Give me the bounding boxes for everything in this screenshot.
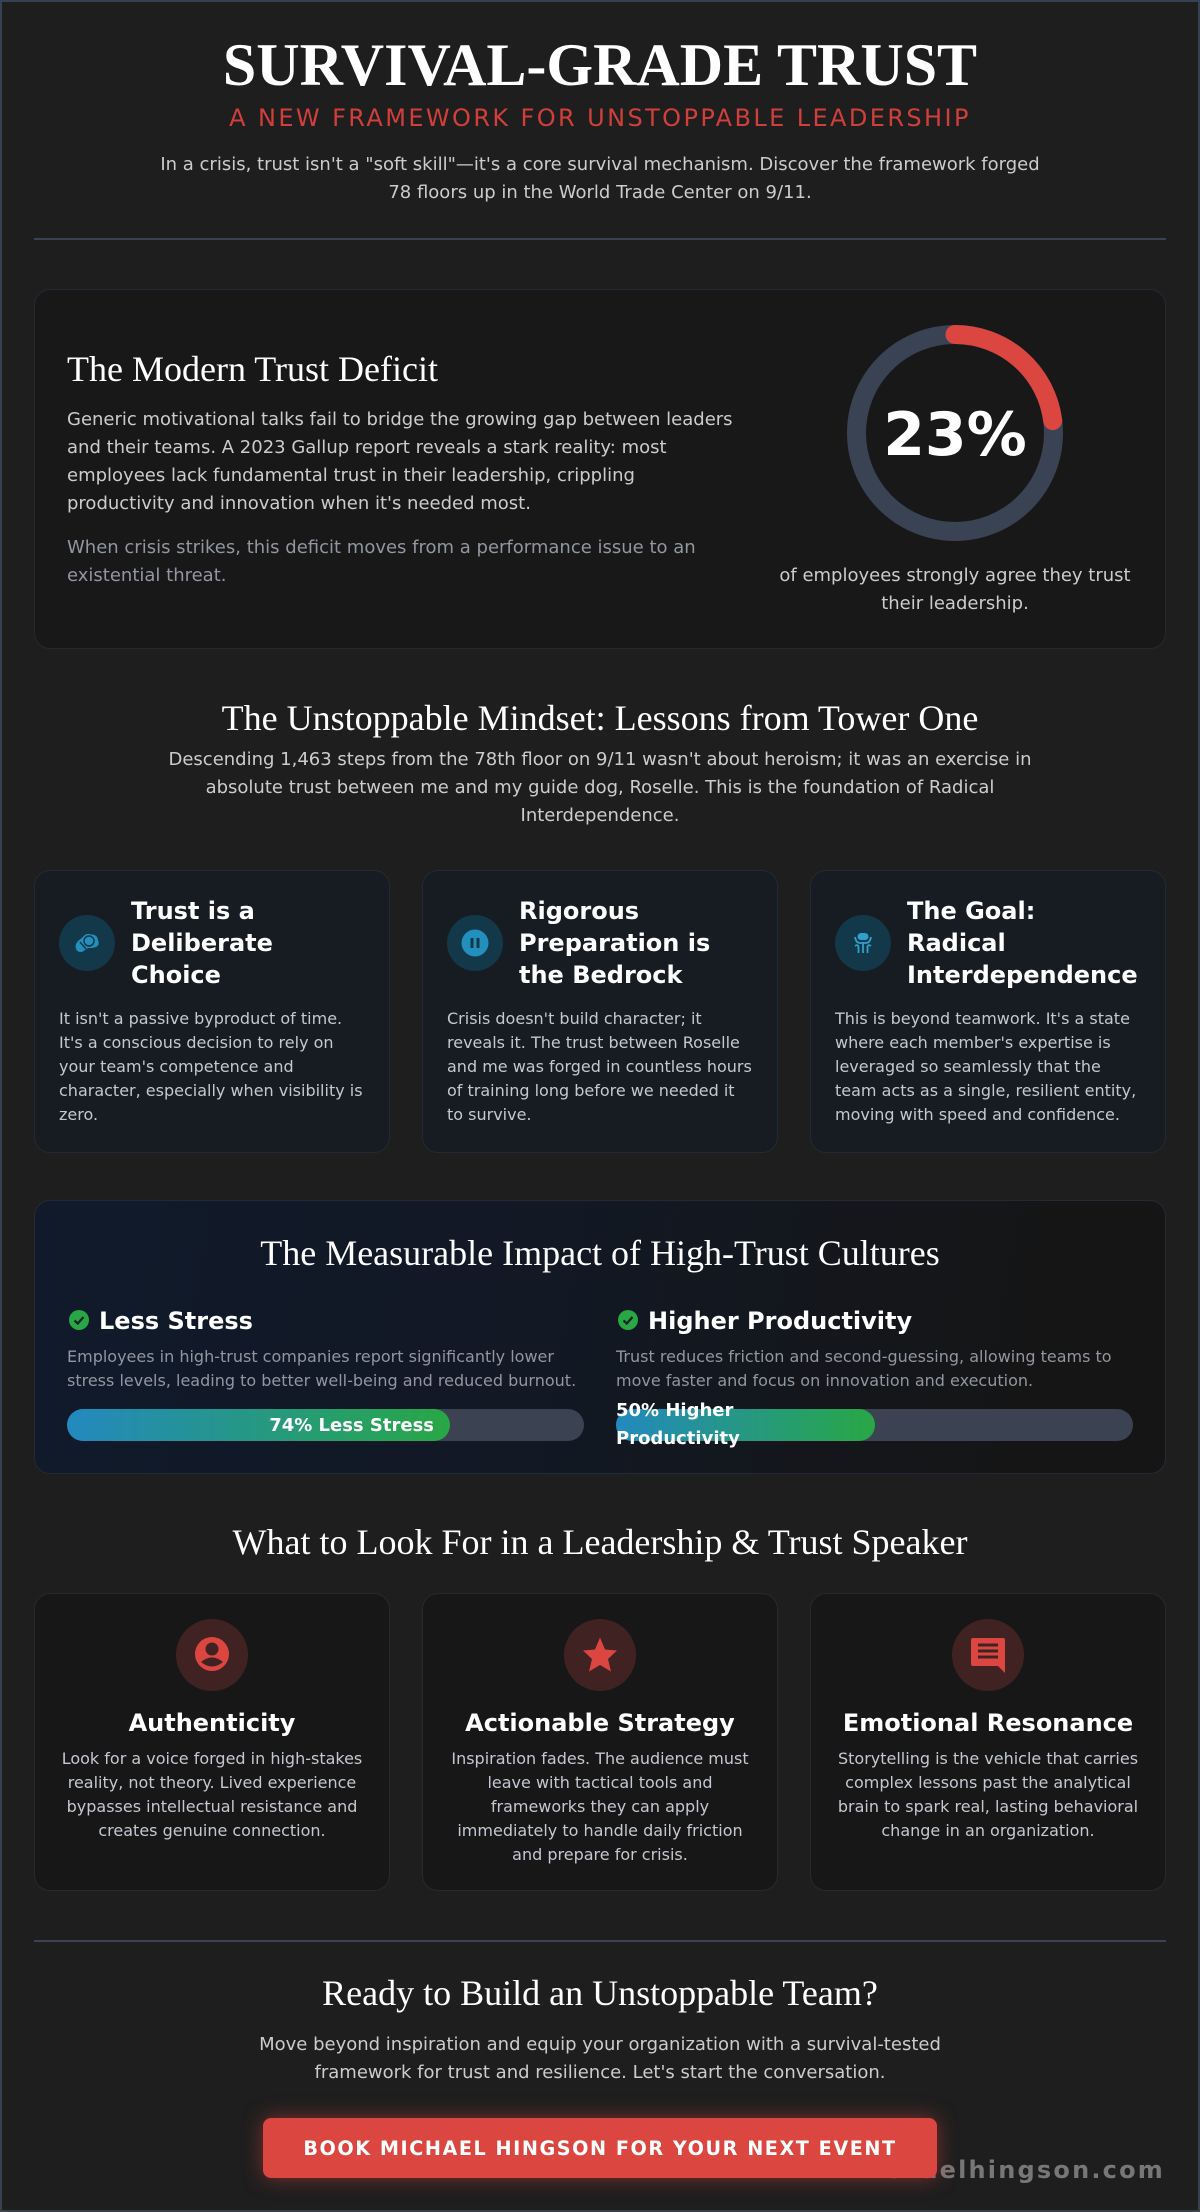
icon: handshake — [59, 915, 115, 971]
card text: complex lessons past the analytical — [845, 1773, 1131, 1792]
section heading: what to look for: What to Look For in a Leadership & Trust Speaker — [233, 1522, 967, 1562]
metric text — [67, 1347, 576, 1390]
card title: Choice — [131, 961, 221, 989]
call to action text — [259, 2034, 941, 2083]
card text: moving with speed and confidence. — [835, 1105, 1120, 1124]
section heading: mindset — [168, 698, 1032, 826]
card text: This is beyond teamwork. It's a state — [835, 1009, 1130, 1028]
card text — [834, 1009, 1136, 1124]
card text: immediately to handle daily friction — [457, 1821, 743, 1840]
metric text: stress levels, leading to better well-being and reduced burnout. — [67, 1371, 576, 1390]
card text: and prepare for crisis. — [512, 1845, 688, 1864]
icon: pause circle — [447, 915, 503, 971]
card title — [131, 897, 273, 989]
card text: Look for a voice forged in high-stakes — [62, 1749, 362, 1768]
card text: Storytelling is the vehicle that carries — [838, 1749, 1138, 1768]
card title: Preparation is — [519, 929, 710, 957]
card title: Actionable Strategy — [465, 1709, 735, 1737]
card text: creates genuine connection. — [98, 1821, 326, 1840]
card text: bypasses intellectual resistance and — [67, 1797, 357, 1816]
metric text — [616, 1347, 1112, 1390]
panel: measurable impact — [34, 1200, 1166, 1474]
card text — [838, 1749, 1138, 1840]
intro: absolute trust between me and my guide dog, Roselle. This is the foundation of Radical — [206, 777, 994, 798]
title: SURVIVAL-GRADE TRUST — [223, 32, 977, 98]
metric: higher productivity — [616, 1307, 1112, 1390]
button: BOOK MICHAEL HINGSON FOR YOUR NEXT EVENT — [303, 2137, 897, 2160]
card text: team acts as a single, resilient entity, — [835, 1081, 1136, 1100]
bar fill — [67, 1409, 450, 1441]
intro text: 78 floors up in the World Trade Center on 9/11. — [388, 182, 812, 203]
body text — [67, 409, 733, 514]
intro — [168, 749, 1032, 826]
panel: modern trust deficit — [34, 289, 1166, 649]
card title: Radical — [907, 929, 1006, 957]
card text: reality, not theory. Lived experience — [68, 1773, 356, 1792]
donut chart: 23% — [847, 325, 1063, 541]
card: rigorous preparation — [422, 870, 778, 1153]
card title — [519, 897, 710, 989]
card title: Emotional Resonance — [843, 1709, 1133, 1737]
donut caption: of employees strongly agree they trust — [779, 565, 1131, 586]
card title — [907, 897, 1138, 989]
card text: and me was forged in countless hours — [447, 1057, 752, 1076]
card text — [59, 1009, 363, 1124]
header — [160, 32, 1040, 203]
metric title: Higher Productivity — [648, 1307, 912, 1335]
body text: employees lack fundamental trust in their leadership, crippling — [67, 465, 635, 486]
button — [263, 2118, 937, 2178]
heading: The Unstoppable Mindset: Lessons from Tower One — [222, 698, 978, 738]
card title: the Bedrock — [519, 961, 682, 989]
call to action text: framework for trust and resilience. Let's start the conversation. — [315, 2062, 885, 2083]
impact heading: The Measurable Impact of High-Trust Cultures — [260, 1233, 940, 1273]
heading: The Modern Trust Deficit — [67, 349, 438, 389]
card text: It isn't a passive byproduct of time. — [59, 1009, 342, 1028]
card text: Crisis doesn't build character; it — [447, 1009, 702, 1028]
card title: Rigorous — [519, 897, 639, 925]
card text: change in an organization. — [881, 1821, 1095, 1840]
card text: character, especially when visibility is — [59, 1081, 363, 1100]
intro text — [160, 154, 1040, 203]
body text: productivity and innovation when it's needed most. — [67, 493, 531, 514]
metric title: Less Stress — [99, 1307, 253, 1335]
bar label: 74% Less Stress — [269, 1415, 434, 1436]
card: actionable strategy — [422, 1593, 778, 1891]
card: radical interdependence — [810, 870, 1166, 1153]
card title: Interdependence — [907, 961, 1138, 989]
icon: people — [835, 915, 891, 971]
icon: check — [618, 1310, 638, 1330]
card text: your team's competence and — [59, 1057, 294, 1076]
bar: 74% less stress — [67, 1409, 584, 1441]
card text: frameworks they can apply — [491, 1797, 709, 1816]
card: emotional resonance — [810, 1593, 1166, 1891]
watermark: michaelhingson.com — [848, 2156, 1165, 2184]
card text: of training long before we needed it — [447, 1081, 735, 1100]
icon: speech bubble — [952, 1619, 1024, 1691]
card text: brain to spark real, lasting behavioral — [838, 1797, 1138, 1816]
metric text: Trust reduces friction and second-guessing, allowing teams to — [616, 1347, 1112, 1366]
intro: Descending 1,463 steps from the 78th floor on 9/11 wasn't about heroism; it was an exercise in — [168, 749, 1032, 770]
bar fill — [616, 1409, 875, 1441]
muted text — [67, 537, 696, 586]
icon: star — [564, 1619, 636, 1691]
card text: zero. — [59, 1105, 98, 1124]
call to action heading: Ready to Build an Unstoppable Team? — [322, 1973, 878, 2013]
card text: reveals it. The trust between Roselle — [447, 1033, 740, 1052]
card text: Inspiration fades. The audience must — [451, 1749, 749, 1768]
card title: Trust is a — [131, 897, 255, 925]
card title: The Goal: — [907, 897, 1035, 925]
icon: user — [176, 1619, 248, 1691]
icon: check — [69, 1310, 89, 1330]
card: trust is a deliberate choice — [34, 870, 390, 1153]
metric: less stress — [67, 1307, 576, 1390]
metric text: Employees in high-trust companies report significantly lower — [67, 1347, 554, 1366]
card text: leveraged so seamlessly that the — [835, 1057, 1101, 1076]
body text: and their teams. A 2023 Gallup report reveals a stark reality: most — [67, 437, 667, 458]
card text: to survive. — [447, 1105, 532, 1124]
card: authenticity — [34, 1593, 390, 1891]
bar label — [616, 1400, 740, 1449]
card title: Deliberate — [131, 929, 273, 957]
card text: where each member's expertise is — [835, 1033, 1111, 1052]
muted text: When crisis strikes, this deficit moves from a performance issue to an — [67, 537, 696, 558]
call to action text: Move beyond inspiration and equip your organization with a survival-tested — [259, 2034, 941, 2055]
card text — [451, 1749, 749, 1864]
bar label: Productivity — [616, 1428, 740, 1449]
card text — [447, 1009, 752, 1124]
metric text: move faster and focus on innovation and execution. — [616, 1371, 1033, 1390]
card text — [62, 1749, 362, 1840]
intro: Interdependence. — [521, 805, 679, 826]
card text: leave with tactical tools and — [487, 1773, 713, 1792]
bar: 50% higher productivity — [616, 1409, 1133, 1441]
donut caption — [779, 565, 1131, 614]
bar label: 50% Higher — [616, 1400, 733, 1421]
body text: Generic motivational talks fail to bridge the growing gap between leaders — [67, 409, 733, 430]
donut caption: their leadership. — [881, 593, 1029, 614]
card text: It's a conscious decision to rely on — [59, 1033, 334, 1052]
intro text: In a crisis, trust isn't a "soft skill"—it's a core survival mechanism. Discover the framework forged — [160, 154, 1040, 175]
card title: Authenticity — [129, 1709, 295, 1737]
donut chart: 23%: 23% — [883, 400, 1027, 470]
subtitle: A NEW FRAMEWORK FOR UNSTOPPABLE LEADERSHIP — [229, 104, 971, 132]
muted text: existential threat. — [67, 565, 226, 586]
